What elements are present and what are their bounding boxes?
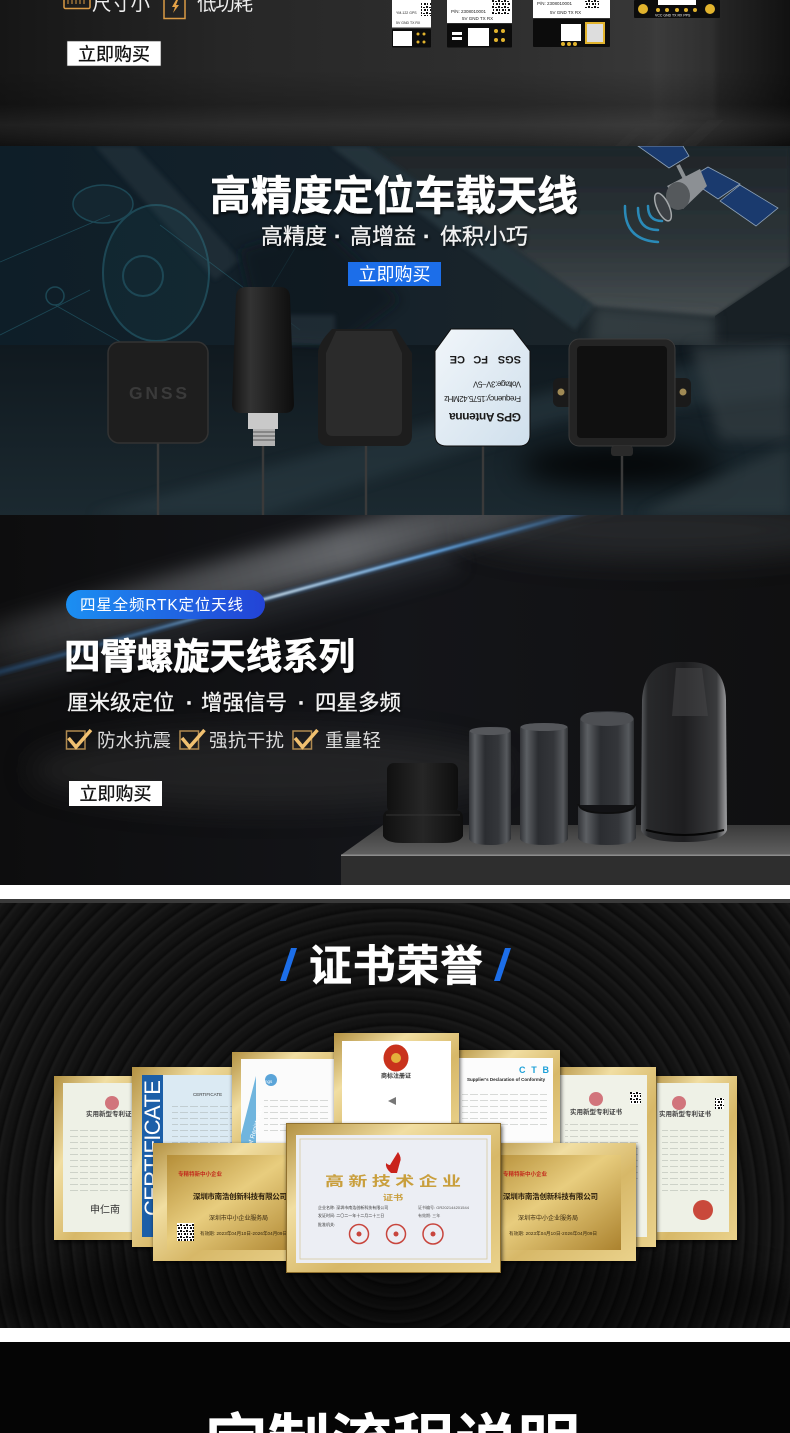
product: GPS module large: 5V GND TX RX <box>550 10 581 15</box>
product: collared cylinder <box>578 711 636 845</box>
certificate: CTB declaration <box>452 1050 560 1150</box>
antenna: adhesive label back <box>435 329 530 520</box>
antenna: adhesive label back: Voltage:3V~5V <box>472 380 521 388</box>
separator band <box>0 1328 790 1342</box>
antenna: adhesive label back: GPS Antenna <box>449 410 521 424</box>
subtitle: 高增益 <box>350 224 416 249</box>
button: buy now: 立即购买 <box>78 44 150 64</box>
subtitle: · <box>334 224 341 249</box>
product: short puck antenna <box>383 763 463 843</box>
antenna: whip with SMA connector <box>232 287 294 520</box>
subtitle: 四星多频 <box>315 691 401 715</box>
certificate: high-tech enterprise centerpiece: 发证时间: 二〇二一年十二月二十三日 <box>318 1212 384 1218</box>
subtitle: 高精度 <box>261 224 327 249</box>
antenna: adhesive label back: Frequency:1575.42MHz <box>444 394 521 403</box>
certificate: registration: ngs <box>265 1079 273 1084</box>
product: GPS module small: 5V GND TX RX <box>396 21 421 25</box>
antenna: square GNSS puck <box>108 342 208 520</box>
panel: certificates <box>0 899 790 1350</box>
certificate: CTB declaration: CTB <box>519 1065 550 1075</box>
product: medium cylinder <box>520 723 568 845</box>
plaque: gold award right: 专精特新中小企业 <box>503 1170 548 1178</box>
plaque: gold award left: 专精特新中小企业 <box>178 1170 223 1178</box>
decoration: dashboard wheel <box>0 184 300 342</box>
certificate: high-tech enterprise centerpiece: 证书编号: GR202144201544 <box>418 1204 470 1210</box>
plaque: gold award right: 深圳市中小企业服务局 <box>518 1214 578 1222</box>
feature: waterproof: 防水抗震 <box>97 730 171 751</box>
panel: customization process <box>0 1342 790 1433</box>
antenna: domed rectangle <box>318 329 412 520</box>
panel: vehicle antenna banner <box>0 146 790 520</box>
certificate: utility patent right: 实用新型专利证书 <box>659 1109 712 1118</box>
antenna: square GNSS puck: GNSS <box>129 383 187 403</box>
certificate: utility patent left <box>54 1076 132 1242</box>
certificate: high-tech enterprise centerpiece <box>286 1123 501 1273</box>
certificate: registration: of Registration <box>247 1104 266 1147</box>
icon: ruler <box>64 0 90 8</box>
certificate: trademark registration <box>334 1033 459 1133</box>
certificate: high-tech enterprise centerpiece: 证书 <box>383 1192 403 1202</box>
plaque: gold award left: 有效期: 2023年04月10日-2026年04月09日 <box>200 1230 287 1237</box>
certificate: high-tech enterprise centerpiece: 企业名称: 深圳市南浩创新科技有限公司 <box>318 1204 388 1210</box>
product: GPS module large <box>533 0 610 47</box>
certificate: high-tech enterprise centerpiece: 高新技术企业 <box>325 1173 461 1189</box>
product: GPS module wide <box>634 0 720 18</box>
certificate: utility patent overlap <box>550 1067 656 1247</box>
product: GPS module medium: P/N: 2308010001 <box>451 9 487 14</box>
button: buy now: 立即购买 <box>358 264 430 284</box>
feature: lightweight <box>293 730 381 751</box>
certificate: blue CERTIFICATE: CERTIFICATE <box>193 1092 222 1097</box>
certificate: utility patent right <box>647 1076 737 1240</box>
certificate: trademark registration: 商标注册证 <box>381 1072 411 1080</box>
certificate: high-tech enterprise centerpiece: 批准机关: <box>318 1221 335 1227</box>
product: GPS module large: P/N: 2308010001 <box>537 1 573 6</box>
plaque: gold award left: 深圳市南浩创新科技有限公司 <box>193 1191 287 1201</box>
feature: lightweight: 重量轻 <box>325 730 381 751</box>
certificate: blue CERTIFICATE <box>132 1067 247 1247</box>
subtitle: 体积小巧 <box>440 224 528 249</box>
plaque: gold award left: 深圳市中小企业服务局 <box>209 1214 268 1222</box>
button: buy now <box>67 41 161 66</box>
product: large dome antenna <box>641 662 727 842</box>
button: buy now <box>69 781 162 806</box>
certificate: utility patent overlap: 实用新型专利证书 <box>570 1107 622 1116</box>
product: GPS module small: YM-122 GPS <box>396 11 417 15</box>
title: 四臂螺旋天线系列 <box>64 636 355 677</box>
button: buy now <box>348 262 441 286</box>
panel: quad-helix antenna banner <box>0 515 790 885</box>
product: GPS module small <box>392 0 431 48</box>
plaque: gold award right: 有效期: 2023年04月10日-2026年04月09日 <box>509 1230 597 1237</box>
button: buy now: 立即购买 <box>80 784 152 804</box>
badge: quad-constellation RTK: 四星全频RTK定位天线 <box>80 596 243 614</box>
feature: anti-interference: 强抗干扰 <box>209 730 284 751</box>
separator band <box>0 885 790 899</box>
antenna: adhesive label back: FC <box>473 353 488 365</box>
certificate: registration <box>232 1052 342 1152</box>
icon: signal waves <box>625 206 662 242</box>
heading <box>280 944 511 986</box>
icon: satellite <box>638 146 778 226</box>
product: GPS module medium <box>447 0 512 48</box>
product: GPS module medium: 5V GND TX RX <box>462 16 493 21</box>
antenna: flanged square <box>553 339 691 520</box>
certificate: CTB declaration: Supplier's Declaration of Conformity <box>467 1077 546 1082</box>
stone table <box>341 825 790 885</box>
badge: quad-constellation RTK <box>66 590 265 619</box>
subtitle: · <box>298 691 305 715</box>
antenna: adhesive label back: CE <box>450 353 465 365</box>
plaque: gold award left <box>153 1143 313 1261</box>
subtitle: 厘米级定位 <box>67 691 175 715</box>
product: slim cylinder <box>469 727 511 845</box>
panel: small-size GPS modules banner <box>0 0 790 146</box>
certificate: blue CERTIFICATE: CERTIFICATE <box>140 1080 165 1216</box>
antenna: adhesive label back: SGS <box>498 353 521 365</box>
certificate: high-tech enterprise centerpiece: 有效期: 三年 <box>418 1212 440 1218</box>
icon: low power <box>164 0 185 18</box>
subtitle: · <box>423 224 430 249</box>
product: GPS module wide: VCC GND TX RX PPS <box>655 14 691 18</box>
subtitle: 增强信号 <box>201 691 287 715</box>
heading: 证书荣誉 <box>309 943 483 991</box>
title: 高精度定位车载天线 <box>210 173 578 219</box>
certificate: utility patent left: 实用新型专利证书 <box>86 1109 138 1118</box>
plaque: gold award right <box>480 1143 636 1261</box>
certificate: utility patent left: 申仁南 <box>90 1203 120 1216</box>
plaque: gold award right: 深圳市南浩创新科技有限公司 <box>503 1191 598 1201</box>
subtitle: · <box>186 691 193 715</box>
